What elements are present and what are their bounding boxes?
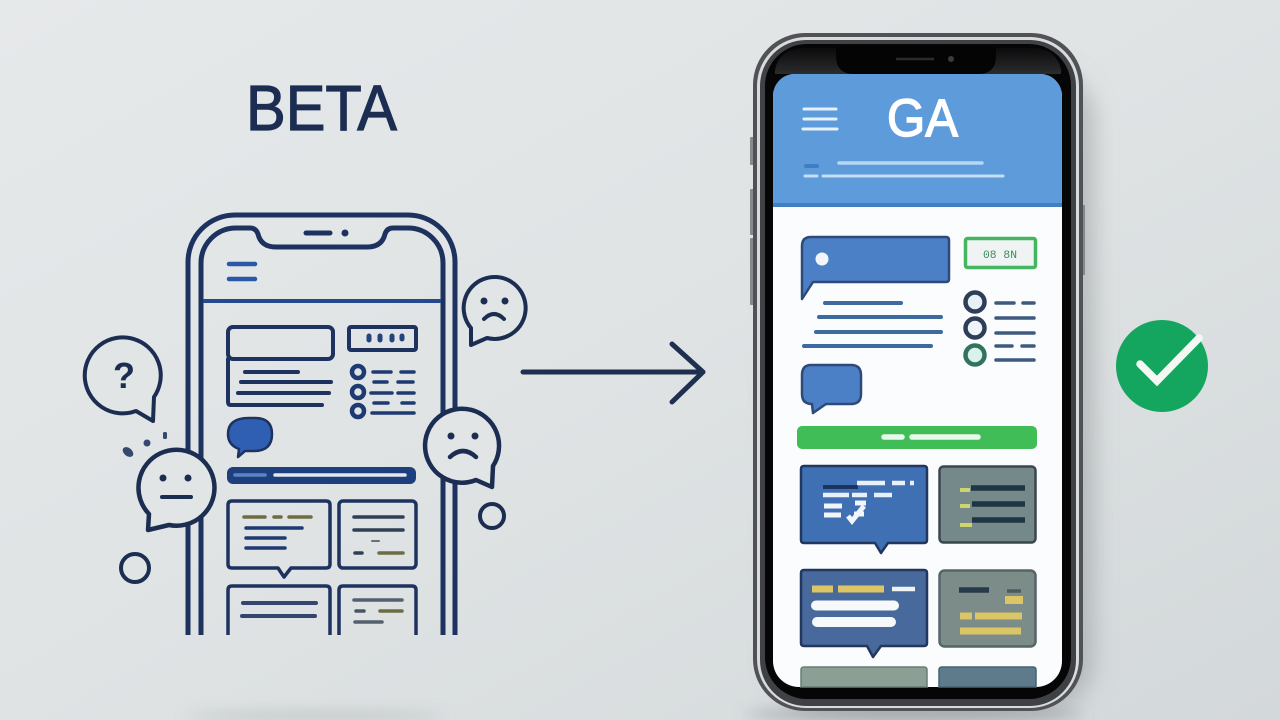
ga list rows bbox=[966, 292, 1034, 364]
beta card left row 1 bbox=[228, 501, 330, 577]
beta phone inner screen and notch bbox=[201, 228, 443, 635]
ga partial cards row 3 bbox=[801, 667, 1036, 687]
beta speaker and camera bbox=[306, 230, 348, 236]
beta hamburger menu bbox=[229, 264, 255, 279]
beta message card bbox=[228, 327, 333, 405]
arrow bbox=[523, 344, 703, 402]
ga grey card 2 bbox=[940, 570, 1036, 646]
ga grey card 1 bbox=[940, 466, 1036, 542]
beta status box bbox=[349, 327, 416, 350]
small circle right bbox=[480, 504, 504, 528]
side buttons bbox=[750, 137, 1085, 305]
phone body bbox=[753, 33, 1083, 711]
hamburger menu bbox=[803, 109, 837, 129]
decorative dots bbox=[121, 432, 167, 459]
ga header bbox=[773, 74, 1062, 203]
beta bottom shadow bbox=[185, 712, 445, 720]
ga small chat bubble bbox=[802, 365, 861, 413]
heading GA: GA bbox=[887, 89, 959, 148]
beta phone outer body bbox=[188, 215, 455, 635]
top bezel band bbox=[775, 48, 1061, 74]
beta header divider bbox=[203, 299, 441, 303]
ga status badge bbox=[966, 238, 1036, 268]
icon: green check badge bbox=[1116, 320, 1208, 412]
speech bubble: question bbox=[85, 337, 161, 421]
ga message card bbox=[802, 237, 949, 346]
ga green action bar bbox=[797, 426, 1037, 449]
header text lines bbox=[805, 163, 1003, 176]
beta card right row 2 bbox=[339, 586, 416, 635]
beta card left row 2 bbox=[228, 586, 330, 635]
speech bubble: sad face bbox=[425, 409, 499, 487]
notch bbox=[836, 46, 996, 74]
ga blue card 2 bbox=[801, 570, 927, 657]
bottom shadow bbox=[745, 708, 1085, 720]
ga status badge: 08 8N bbox=[983, 250, 1017, 262]
small circle bottom left bbox=[121, 554, 149, 582]
speech bubble: neutral face bbox=[138, 450, 214, 530]
ga phone bbox=[750, 33, 1085, 711]
screen bbox=[773, 74, 1062, 687]
beta progress bar bbox=[227, 467, 416, 484]
ga phone shadow bbox=[775, 70, 1093, 710]
title: BETA: BETA bbox=[246, 72, 397, 144]
beta blue chat bubble bbox=[228, 418, 272, 457]
beta list rows bbox=[352, 366, 414, 417]
speech bubble: question: ? bbox=[113, 355, 135, 396]
beta phone wireframe bbox=[188, 215, 455, 635]
beta card right row 1 bbox=[339, 501, 416, 568]
ga blue card 1 bbox=[801, 466, 927, 553]
speech bubble: frown top right bbox=[464, 277, 526, 345]
